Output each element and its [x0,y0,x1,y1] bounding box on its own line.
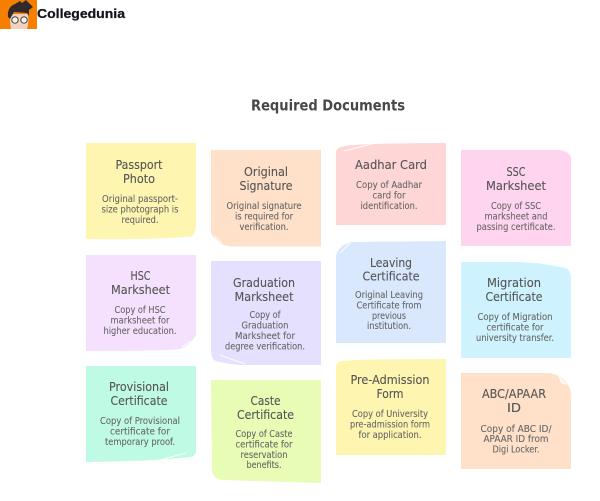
panel: Original Signature: is required for [235,212,293,222]
panel: Pre-Admission Form: Pre-Admission [350,372,430,387]
panel: Migration Certificate: Copy of Migration [478,312,552,323]
panel: ABC/APAAR ID: ABC/APAAR [482,386,546,401]
panel: Migration Certificate: university transfer. [476,333,554,344]
panel: Provisional Certificate: temporary proof. [105,437,175,448]
panel: Caste Certificate: Copy of Caste [236,429,293,440]
title: Required Documents [251,96,405,114]
panel: Graduation Marksheet: Graduation [242,320,288,332]
panel: Aadhar Card: Copy of Aadhar [356,180,422,191]
panel: Passport Photo: size photograph is [102,204,178,216]
panel: Migration Certificate: Migration [487,275,541,290]
panel: Leaving Certificate: Leaving [370,255,412,270]
panel: HSC Marksheet: Copy of HSC [114,305,166,316]
panel: Passport Photo [86,143,196,239]
panel: Pre-Admission Form: Copy of University [352,409,428,420]
panel: Migration Certificate: certificate for [486,322,544,334]
panel: Original Signature: Signature [240,178,293,193]
panel: HSC Marksheet: Marksheet [111,282,170,297]
panel: Provisional Certificate: Provisional [109,379,169,394]
panel: Caste Certificate: certificate for [236,440,293,450]
panel: Original Signature: Original [244,164,288,179]
panel: Original Signature [211,150,321,246]
panel: ABC/APAAR ID: APAAR ID from [484,434,548,445]
panel: Leaving Certificate [336,241,446,343]
panel: Pre-Admission Form: pre-admission form [350,420,430,430]
panel: Original Signature: Original signature [226,201,302,212]
panel: Leaving Certificate: Original Leaving [355,290,423,301]
panel: Aadhar Card: Aadhar Card [355,157,427,172]
panel: HSC Marksheet: HSC [130,268,151,283]
panel: HSC Marksheet: higher education. [104,326,176,337]
panel: Aadhar Card: card for [372,190,406,202]
panel: Graduation Marksheet: Copy of [250,310,281,321]
panel: Graduation Marksheet: Graduation [233,275,295,290]
panel: Caste Certificate: reservation [240,450,288,461]
panel: Aadhar Card [336,143,446,225]
panel: Original Signature: verification. [240,222,288,233]
panel: Aadhar Card: identification. [360,201,418,212]
panel: Provisional Certificate: Certificate [110,393,168,408]
panel: SSC Marksheet [461,150,571,246]
panel: HSC Marksheet [86,255,196,351]
panel: SSC Marksheet: Marksheet [486,178,546,193]
panel: ABC/APAAR ID: Copy of ABC ID/ [480,424,552,435]
panel: Provisional Certificate: Copy of Provisional [100,416,180,427]
panel: Passport Photo: Photo [123,171,155,186]
panel: Graduation Marksheet: degree verification. [225,342,305,352]
panel: Provisional Certificate: certificate for [110,426,170,438]
panel: Caste Certificate: benefits. [246,460,282,471]
panel: Passport Photo: Passport [116,157,163,172]
panel: Leaving Certificate: previous [372,311,406,322]
panel: Graduation Marksheet [211,261,321,365]
panel: SSC Marksheet: SSC [506,164,526,179]
panel: ABC/APAAR ID: ID [507,400,521,415]
panel: Migration Certificate [461,262,571,358]
logo wordmark: Collegedunia [37,7,126,21]
panel: Leaving Certificate: institution. [367,321,411,332]
panel: Provisional Certificate [86,366,196,462]
panel: SSC Marksheet: Copy of SSC [491,201,541,212]
panel: Graduation Marksheet: Marksheet for [235,331,295,342]
logo: Collegedunia [0,0,126,29]
panel: Caste Certificate: Certificate [237,407,294,422]
panel: Caste Certificate [211,380,321,483]
panel: Caste Certificate: Caste [250,393,281,408]
panel: ABC/APAAR ID: Digi Locker. [492,444,540,456]
panel: HSC Marksheet: marksheet for [110,316,170,326]
panel: Pre-Admission Form [336,359,446,455]
panel: Leaving Certificate: Certificate [362,268,420,284]
panel: Migration Certificate: Certificate [486,289,543,304]
panel: ABC/APAAR ID [461,373,571,469]
panel: Pre-Admission Form: Form [376,386,404,401]
icon: student mascot [0,0,37,29]
panel: Passport Photo: Original passport- [102,194,178,205]
panel: Graduation Marksheet: Marksheet [234,289,294,304]
panel: Passport Photo: required. [122,215,158,226]
panel: Leaving Certificate: Certificate from [356,300,422,312]
panel: SSC Marksheet: passing certificate. [476,222,556,233]
panel: SSC Marksheet: marksheet and [484,212,548,222]
panel: Pre-Admission Form: for application. [358,430,422,441]
